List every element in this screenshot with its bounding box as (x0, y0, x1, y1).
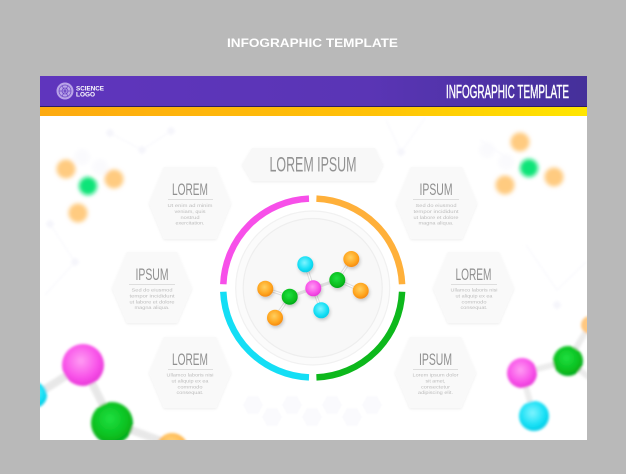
panel: hexagon top left: LOREM (172, 180, 208, 199)
ring chart: four segments (223, 199, 402, 377)
panel: hexagon middle left: IPSUM (136, 265, 168, 284)
panel: hexagon top left: exercitation. (176, 220, 204, 226)
panel: hexagon middle left (112, 268, 192, 324)
logo (56, 82, 104, 100)
heading banner (243, 157, 382, 182)
panel: hexagon bottom right: sit amet, (426, 378, 446, 384)
decorative small hexagons (243, 396, 382, 426)
panel: hexagon middle left: Sed do eiusmod (132, 288, 173, 294)
panel: hexagon middle right: Ullamco laboris nisi (450, 288, 498, 294)
molecule: blurred bottom left (40, 342, 188, 440)
panel: hexagon bottom right: adipiscing elit. (418, 390, 453, 396)
panel: hexagon bottom left: ut aliquip ex ea (172, 378, 209, 384)
molecule: blurred bottom right (507, 316, 599, 431)
panel: hexagon bottom right: consectetur (421, 384, 450, 390)
panel: hexagon middle left: ut labore et dolore (130, 300, 175, 306)
main title: INFOGRAPHIC TEMPLATE (227, 37, 398, 50)
central discs (236, 211, 390, 365)
panel: hexagon middle right: LOREM (456, 265, 492, 284)
molecule: blurred top right (479, 132, 564, 194)
molecule: blurred top left (56, 149, 124, 222)
panel: hexagon middle right: consequat. (460, 305, 488, 311)
panel: hexagon top left: Ut enim ad minim (168, 203, 212, 209)
panel: hexagon middle right: ut aliquip ex ea (456, 294, 493, 300)
panel: hexagon middle left: magna aliqua. (134, 305, 170, 311)
accent bar (40, 107, 587, 116)
panel: hexagon middle left: tempor incididunt (130, 294, 175, 300)
panel: hexagon bottom left: commodo (178, 384, 203, 390)
panel: hexagon bottom left: Ullamco laboris nisi (166, 372, 214, 378)
panel: hexagon top right (396, 184, 476, 240)
panel: hexagon top left: nostrud (180, 215, 200, 221)
panel: hexagon bottom right: IPSUM (419, 350, 452, 369)
molecule: centre (257, 251, 369, 326)
header divider line (40, 106, 587, 107)
panel: hexagon middle right: commodo (462, 300, 487, 306)
panel: infographic card (40, 76, 587, 440)
background: faint network lines (48, 129, 558, 307)
heading banner: LOREM IPSUM (270, 154, 356, 177)
logo: SCIENCE (76, 86, 104, 92)
panel: hexagon bottom left: consequat. (176, 390, 204, 396)
panel: hexagon bottom left (150, 354, 230, 409)
panel: hexagon top left (150, 184, 230, 240)
panel: hexagon top right: ut labore et dolore (414, 215, 459, 221)
panel: hexagon middle right (434, 268, 514, 324)
panel: hexagon top right: magna aliqua. (418, 220, 454, 226)
logo: LOGO (76, 92, 95, 98)
panel: hexagon bottom right (396, 354, 476, 409)
header band (40, 76, 587, 106)
panel: hexagon top left: veniam, quis (174, 209, 206, 215)
panel: hexagon bottom right: Lorem ipsum dolor (412, 372, 459, 378)
panel: hexagon top right: Sed do eiusmod (416, 203, 457, 209)
panel: hexagon bottom left: LOREM (172, 350, 208, 369)
panel: hexagon top right: tempor incididunt (414, 209, 459, 215)
panel: hexagon top right: IPSUM (420, 180, 452, 199)
